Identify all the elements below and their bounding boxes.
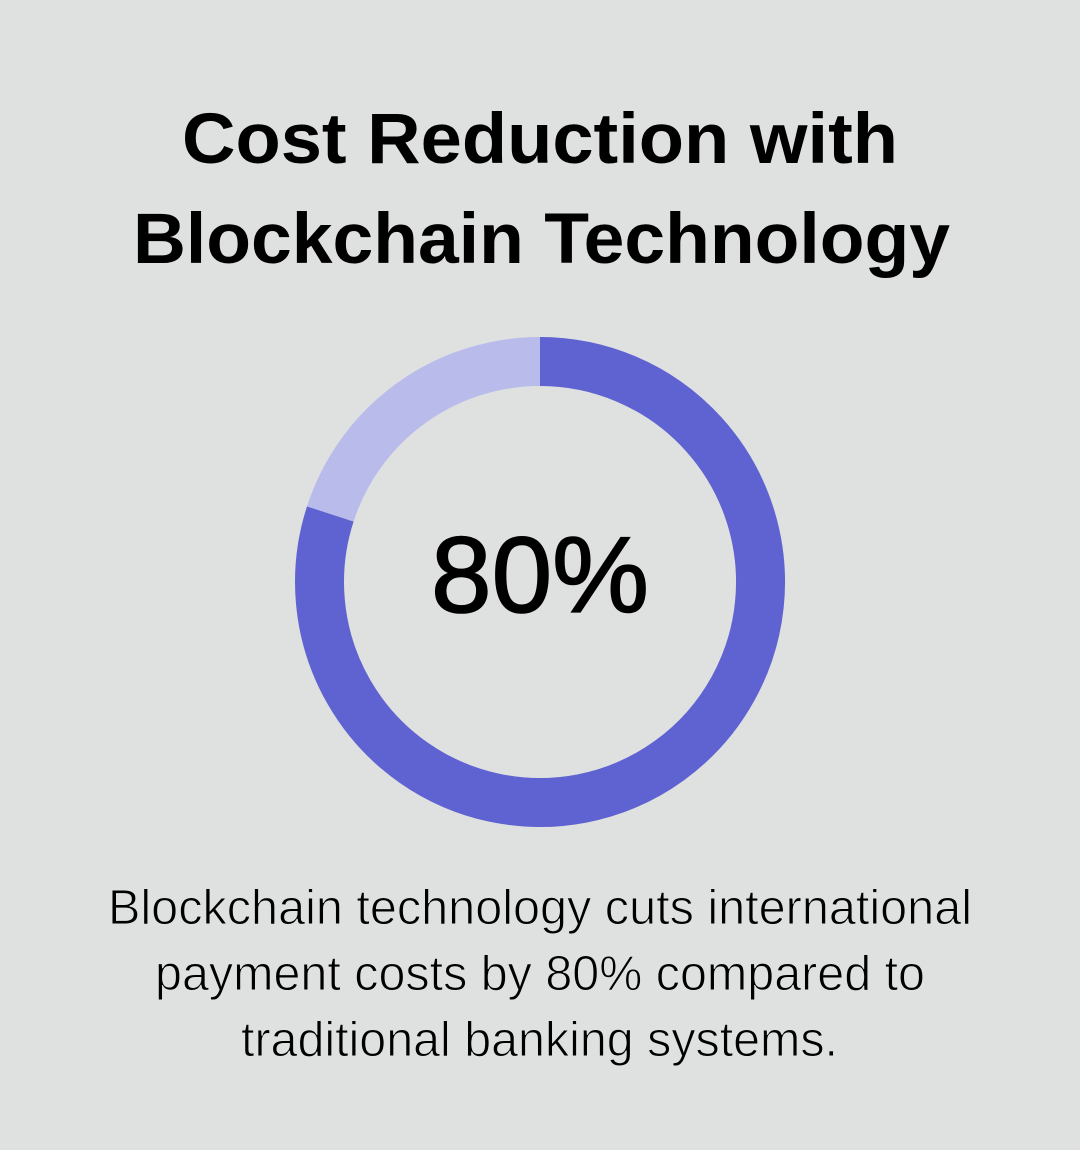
- donut segment: remaining 20%: [330, 362, 540, 514]
- title: [133, 100, 951, 279]
- donut center value: 80%: [431, 514, 649, 635]
- title: Cost Reduction with: [182, 100, 898, 179]
- description text: payment costs by 80% compared to: [155, 947, 925, 1001]
- description text: Blockchain technology cuts international: [108, 881, 972, 935]
- description text: [108, 881, 972, 1067]
- title: Blockchain Technology: [133, 200, 951, 279]
- donut segment: 80% share: [320, 362, 761, 802]
- description text: traditional banking systems.: [241, 1013, 838, 1067]
- donut chart: 80%: [320, 362, 761, 802]
